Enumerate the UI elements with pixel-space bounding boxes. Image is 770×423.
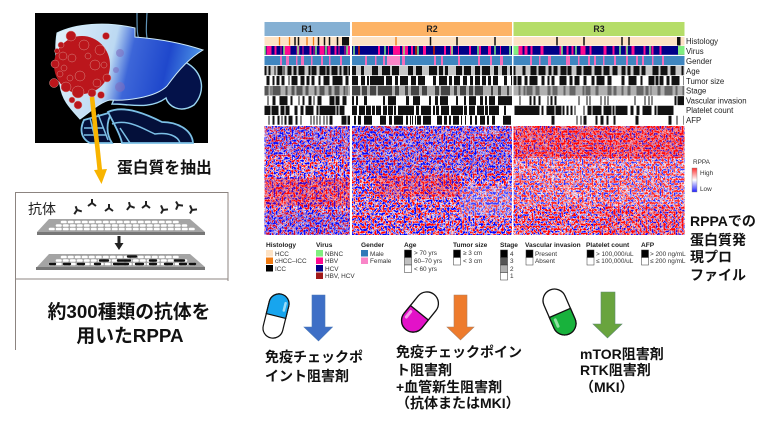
track labels: Stage — [686, 86, 706, 96]
legend: tumor size: ≥ 3 cm — [463, 250, 482, 257]
text: antibody: 抗体 — [28, 201, 56, 217]
text: mTOR and RTK inhibitors: mTOR阻害剤 — [580, 346, 664, 362]
legend: platelet count: > 100,000/uL — [596, 251, 634, 258]
track labels — [686, 37, 747, 125]
label: protein extraction: 蛋白質を抽出 — [117, 159, 212, 177]
caption: RPPA protein expression profile: 現プロ — [690, 249, 732, 265]
text: checkpoint plus angiogenesis inhibitor: ト阻害剤 — [396, 362, 452, 378]
arrow: orange — [447, 295, 474, 340]
legend: virus: NBNC — [325, 251, 343, 258]
legend: tumor size — [453, 242, 488, 265]
arrow: blue — [304, 295, 332, 341]
annotation track: platelet count — [264, 106, 684, 115]
track labels: Gender — [686, 57, 712, 66]
track labels: Vascular invasion — [686, 96, 747, 106]
legend: age: Age — [404, 242, 417, 249]
track labels: Histology — [686, 37, 718, 46]
legend: virus: HCV — [325, 266, 339, 273]
text: RPPA with 300 antibodies: 約300種類の抗体を — [48, 301, 210, 322]
text: RPPA with 300 antibodies — [48, 301, 210, 346]
legend: vascular invasion: Vascular invasion — [525, 242, 581, 249]
stomach — [112, 60, 201, 109]
legend: gender: Female — [370, 258, 392, 265]
icon: array slide bottom — [36, 254, 205, 270]
legend: tumor size: < 3 cm — [463, 258, 482, 265]
intestines — [82, 109, 193, 143]
column headers: R1 — [301, 24, 313, 34]
text: RPPA with 300 antibodies: 用いたRPPA — [76, 325, 184, 346]
legend: platelet count: ≤ 100,000/uL — [596, 258, 634, 265]
icon: small down arrow — [114, 236, 124, 250]
annotation track: age — [264, 66, 684, 75]
legend: platelet count — [586, 242, 634, 265]
legend: histology: ICC — [275, 266, 286, 273]
text: checkpoint plus angiogenesis inhibitor: 免疫チェックポイン — [396, 344, 522, 360]
column headers — [264, 22, 684, 36]
legend: gender: Gender — [361, 242, 385, 249]
column headers: R3 — [593, 24, 605, 34]
liver body — [56, 24, 203, 119]
heatmap: RPPA — [264, 126, 684, 235]
legend: virus: HBV — [325, 258, 339, 265]
legend: histology: cHCC–ICC — [275, 258, 307, 265]
text: checkpoint inhibitor — [265, 349, 363, 384]
icon: array slide top — [37, 219, 205, 235]
legend: age: > 70 yrs — [414, 250, 437, 257]
legend: stage — [500, 242, 518, 280]
legend: age — [404, 242, 442, 273]
legend: histology: Histology — [266, 242, 296, 249]
legend: stage: Stage — [500, 242, 518, 249]
annotation track: AFP — [264, 116, 684, 125]
caption: RPPA protein expression profile — [690, 213, 756, 283]
icon: blue capsule — [261, 292, 291, 340]
track labels: Platelet count — [686, 106, 734, 115]
text: mTOR and RTK inhibitors — [580, 346, 664, 395]
legend: age: < 60 yrs — [414, 266, 437, 273]
text: checkpoint inhibitor: 免疫チェックポ — [265, 349, 363, 365]
legend: stage: 1 — [510, 273, 514, 280]
legend: stage: 3 — [510, 258, 514, 265]
legend: RPPA colour scale: RPPA — [693, 159, 711, 166]
legend: histology: HCC — [275, 251, 289, 258]
annotation track: vascular invasion — [264, 96, 684, 105]
caption: RPPA protein expression profile: ファイル — [690, 267, 746, 283]
legend: histology — [266, 242, 307, 273]
text: checkpoint plus angiogenesis inhibitor: +血管新生阻害剤 — [396, 379, 502, 395]
legend: virus: Virus — [316, 242, 333, 249]
panel: antibody RPPA — [16, 192, 228, 350]
legend: vascular invasion — [525, 242, 581, 265]
tumor — [50, 31, 111, 109]
caption: RPPA protein expression profile: 蛋白質発 — [690, 232, 746, 248]
legend: tumor size: Tumor size — [453, 242, 488, 249]
track labels: Age — [686, 67, 700, 76]
legend: stage: 2 — [510, 266, 514, 273]
text: checkpoint plus angiogenesis inhibitor — [396, 344, 522, 411]
text: mTOR and RTK inhibitors: （MKI） — [580, 379, 634, 395]
arrow: protein extraction — [92, 97, 107, 184]
legend: age: 60–70 yrs — [414, 258, 442, 265]
annotation track: stage — [264, 86, 684, 96]
track labels: AFP — [686, 116, 701, 125]
liver illustration — [35, 13, 208, 143]
legend: AFP: > 200 ng/mL — [650, 251, 686, 258]
legend: RPPA colour scale — [692, 159, 714, 193]
text: mTOR and RTK inhibitors: RTK阻害剤 — [580, 362, 651, 378]
legend: vascular invasion: Absent — [535, 258, 555, 265]
legend: stage: 4 — [510, 251, 514, 258]
icon: antibodies — [72, 199, 197, 215]
annotation track: histology — [264, 37, 684, 46]
legend: AFP: AFP — [641, 242, 655, 249]
legend: RPPA colour scale: High — [700, 170, 714, 177]
annotation track: virus — [264, 46, 684, 55]
track labels: Tumor size — [686, 77, 724, 86]
legend: gender: Male — [370, 251, 384, 258]
legend: platelet count: Platelet count — [586, 242, 630, 249]
legend: RPPA colour scale: Low — [700, 186, 712, 193]
arrow: green — [593, 292, 622, 338]
track labels: Virus — [686, 47, 704, 56]
caption: RPPA protein expression profile: RPPAでの — [690, 213, 756, 229]
legend: AFP — [641, 242, 686, 265]
text: checkpoint plus angiogenesis inhibitor: （抗体またはMKI） — [396, 395, 520, 411]
icon: magenta capsule — [397, 287, 443, 337]
legend: vascular invasion: Present — [535, 251, 557, 258]
icon: green capsule — [539, 285, 580, 339]
legend: AFP: ≤ 200 ng/mL — [650, 258, 686, 265]
text: checkpoint inhibitor: イント阻害剤 — [265, 368, 349, 384]
column headers: R2 — [426, 24, 438, 34]
legend: gender — [361, 242, 392, 265]
legend: virus: HBV, HCV — [325, 273, 355, 280]
annotation track: tumor size — [264, 76, 684, 85]
annotation track: gender — [264, 56, 684, 65]
legend: virus — [316, 242, 355, 280]
